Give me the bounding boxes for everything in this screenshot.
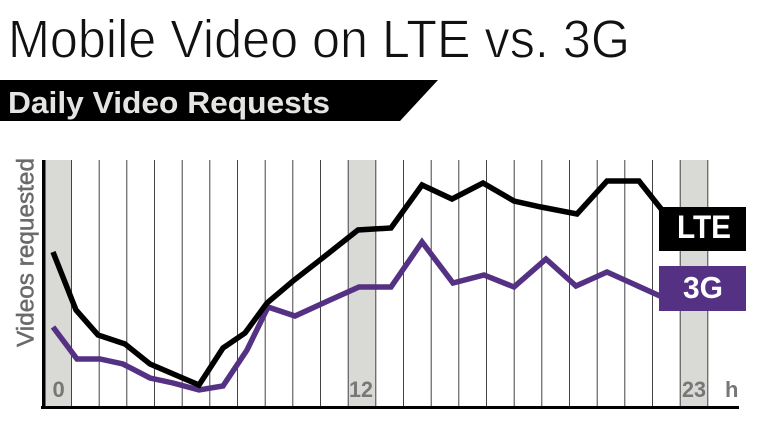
x axis labels (52, 377, 738, 402)
axes (41, 160, 739, 409)
subtitle banner: Daily Video Requests (8, 85, 330, 120)
chart (12, 158, 746, 409)
x axis labels: 12 (349, 377, 373, 402)
hour grid lines (72, 160, 708, 407)
title: Mobile Video on LTE vs. 3G (8, 10, 630, 70)
x axis labels: 0 (52, 377, 65, 402)
legend: 3G (659, 266, 746, 311)
x axis labels: h (725, 377, 738, 402)
legend: LTE (659, 207, 746, 251)
legend: 3G: 3G (683, 270, 723, 305)
3G line (53, 242, 660, 390)
legend: LTE: LTE (677, 209, 731, 245)
highlighted hour bands (45, 160, 708, 407)
x axis labels: 23 (682, 377, 706, 402)
subtitle banner (0, 80, 438, 121)
y axis label: Videos requested (12, 158, 40, 347)
LTE line (53, 181, 662, 385)
